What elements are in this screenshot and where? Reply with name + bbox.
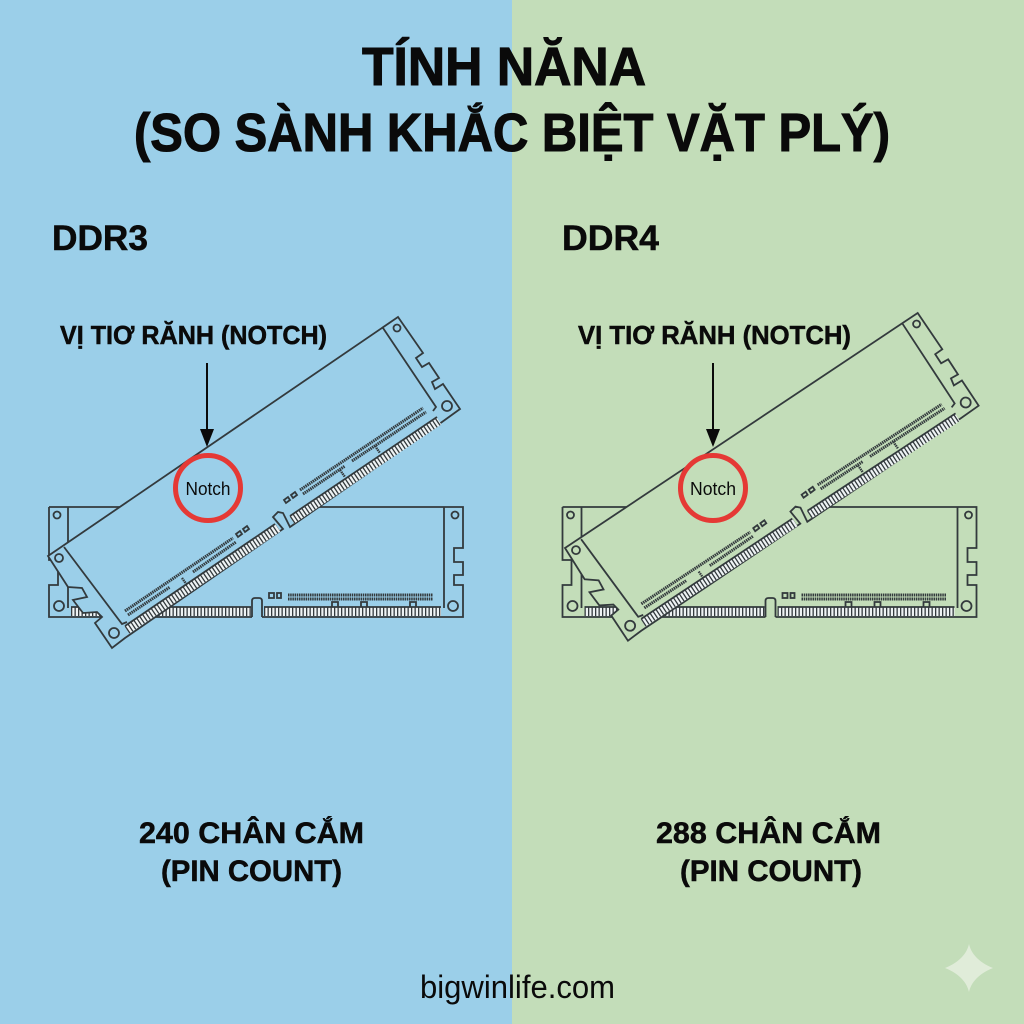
illustration: tilted RAM module: [48, 317, 460, 648]
arrow head: [706, 429, 720, 447]
notch text: Notch: [690, 479, 736, 499]
icon: sparkle: [945, 944, 993, 992]
heading: DDR4: DDR4: [562, 219, 660, 258]
arrow head: [200, 429, 214, 447]
title: [134, 37, 890, 163]
notch position label: VỊ TIƠ RĂNH (NOTCH): [60, 320, 327, 350]
website footer: bigwinlife.com: [420, 969, 615, 1005]
notch position label: VỊ TIƠ RĂNH (NOTCH): [578, 320, 851, 350]
illustration: tilted RAM module: [564, 309, 980, 645]
red notch circle: [176, 456, 240, 520]
pin count text: (PIN COUNT): [161, 855, 342, 888]
heading: DDR3: DDR3: [52, 219, 148, 258]
illustration: straight RAM module: [562, 507, 976, 617]
title: (SO SÀNH KHẮC BIỆT VẶT PLÝ): [134, 102, 890, 163]
pin count text: 240 CHÂN CẮM: [139, 816, 364, 850]
panel: DDR4: [512, 0, 1024, 1024]
pin count text: (PIN COUNT): [680, 855, 862, 888]
arrow to notch: [712, 363, 714, 430]
pin count text: [656, 816, 881, 888]
pin count text: 288 CHÂN CẮM: [656, 816, 881, 850]
red notch circle: [680, 456, 746, 520]
pin count text: [139, 816, 364, 888]
title: TÍNH NĂNA: [362, 37, 646, 97]
notch text: Notch: [186, 479, 230, 499]
illustration: straight RAM module: [49, 507, 463, 617]
arrow to notch: [206, 363, 208, 430]
panel: DDR3: [0, 0, 512, 1024]
